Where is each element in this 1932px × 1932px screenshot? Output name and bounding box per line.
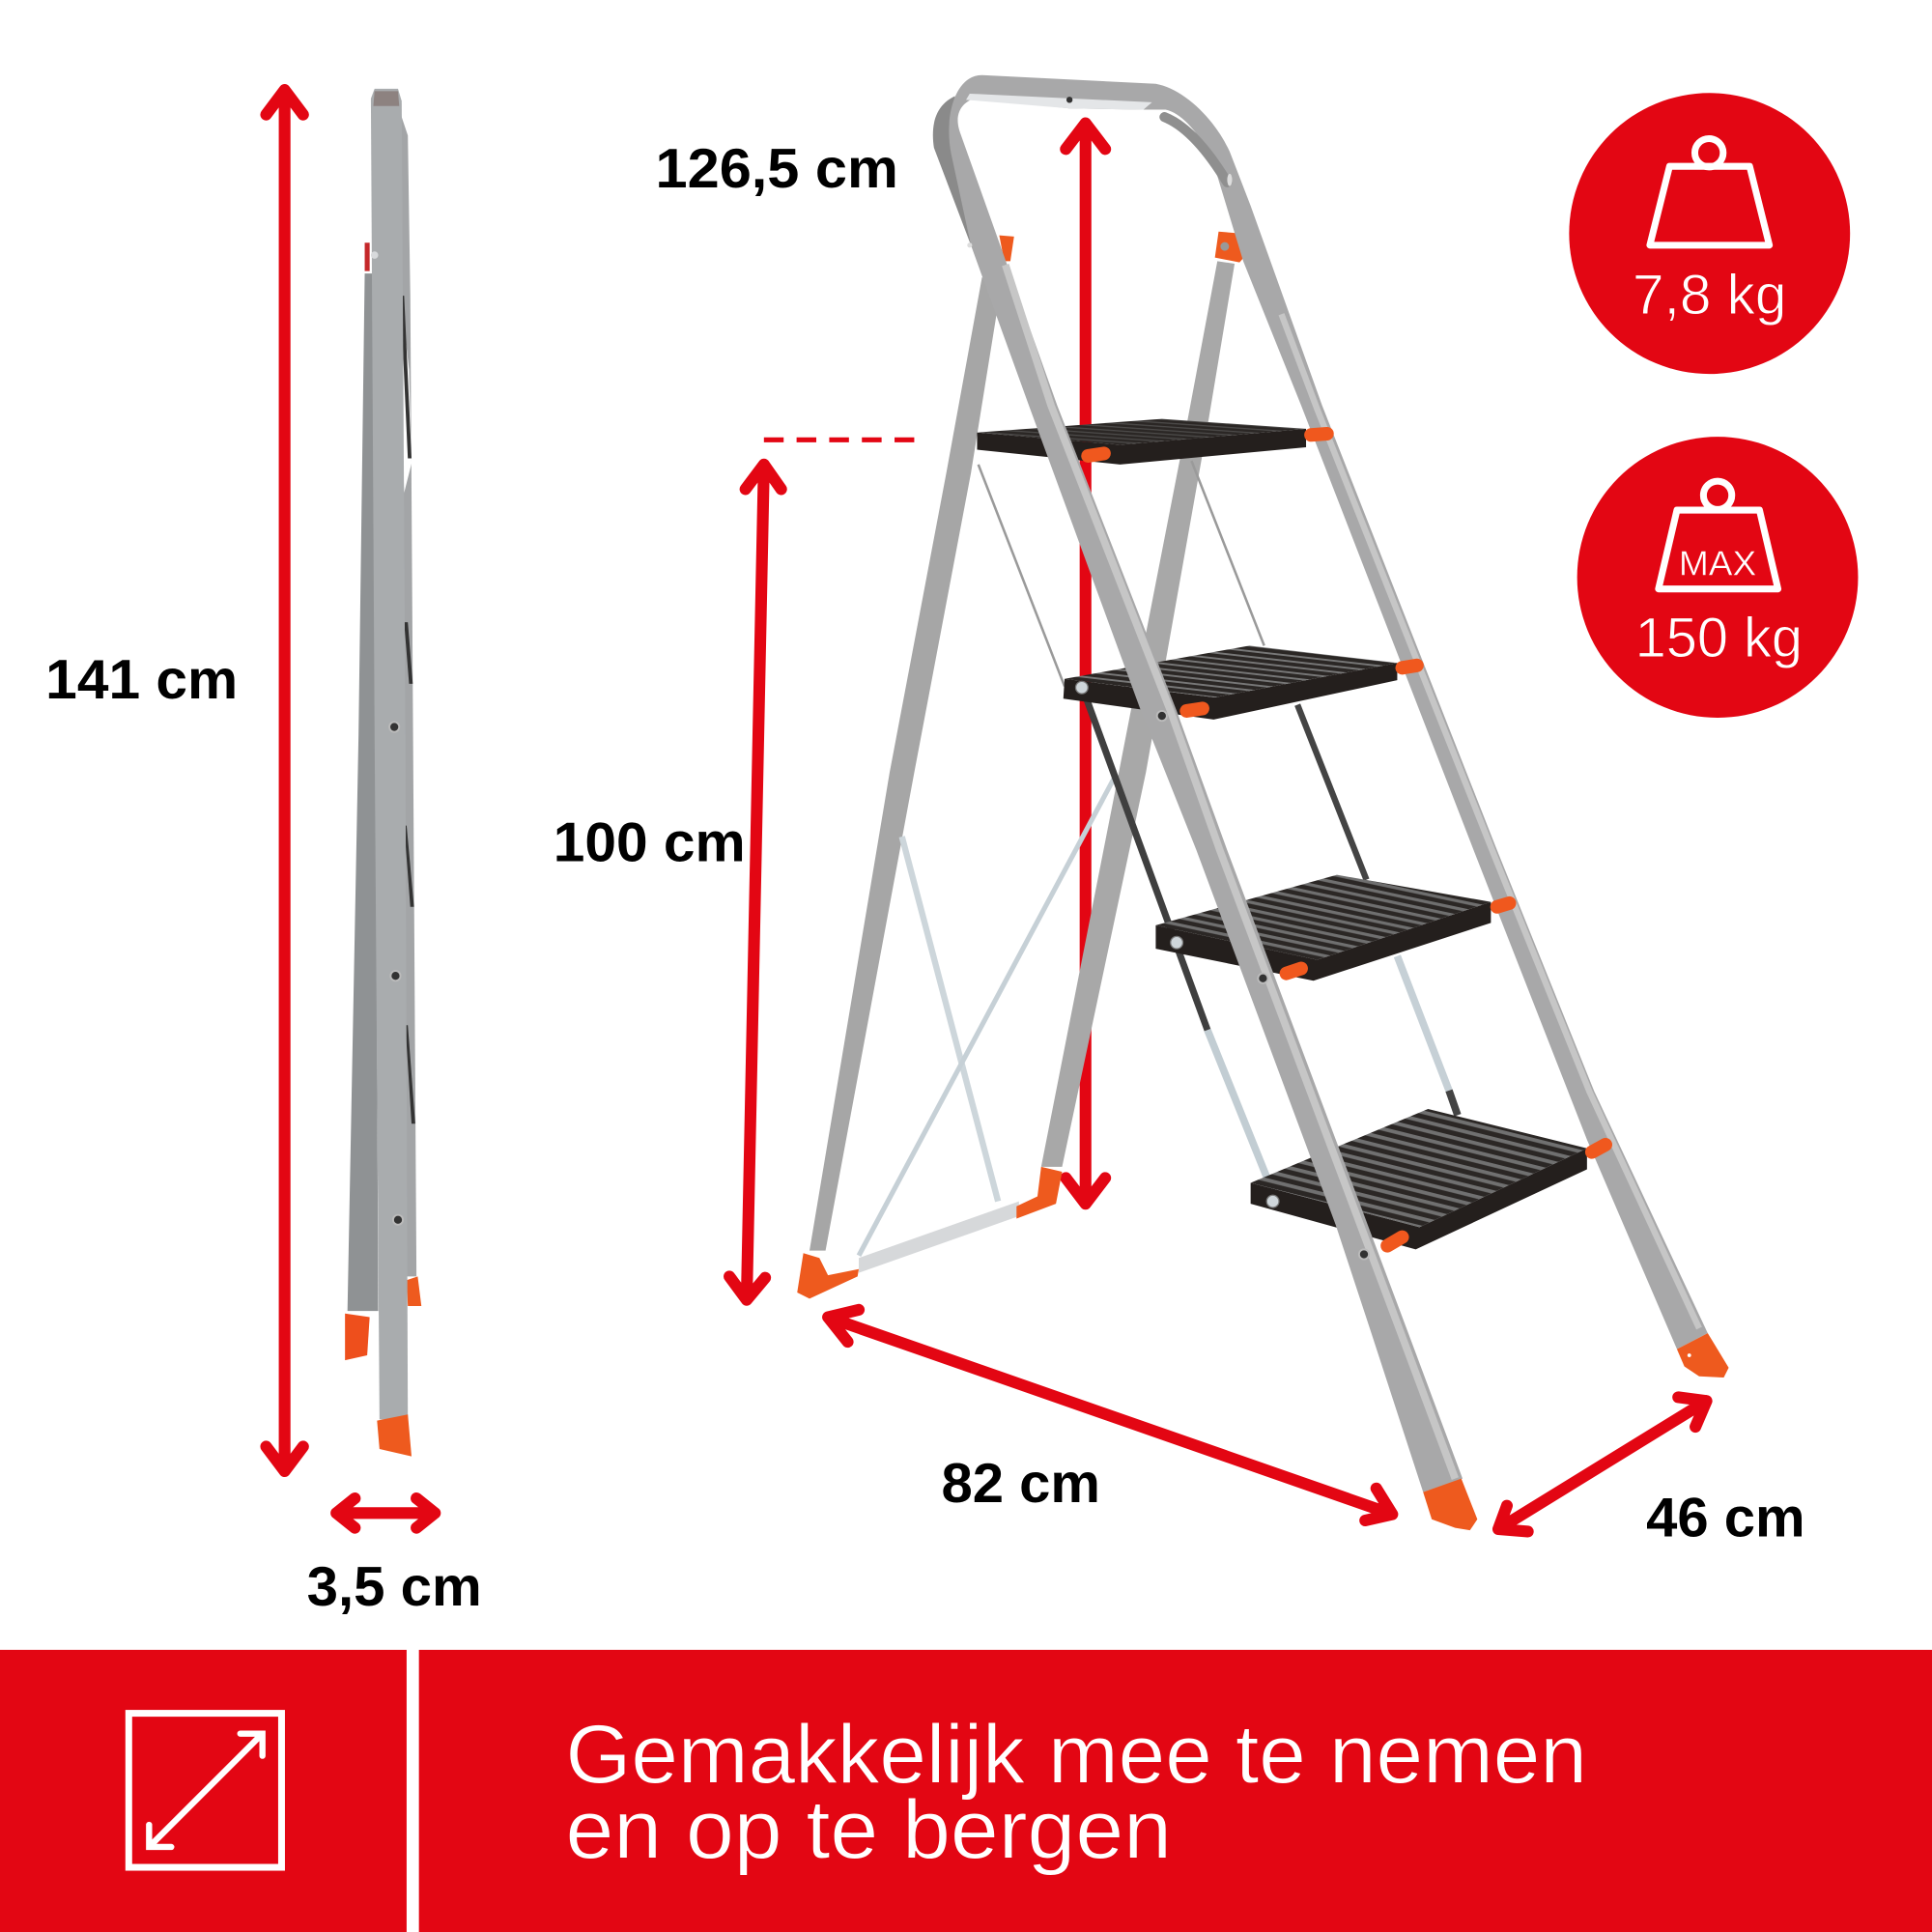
label 141 cm: 141 cm xyxy=(45,649,238,711)
ladder rear frame xyxy=(797,232,1249,1298)
step 1 xyxy=(977,419,1306,465)
label 3,5 cm: 3,5 cm xyxy=(307,1556,482,1618)
width arrow 3,5 cm xyxy=(336,1498,435,1528)
badge: weight 7,8 kg xyxy=(1569,93,1850,374)
bottom banner: en op te bergen xyxy=(565,1782,1172,1876)
step 2 xyxy=(1064,645,1397,720)
badge: max load 150 kg: 150 kg xyxy=(1635,607,1803,669)
arrow 126,5 cm xyxy=(1065,124,1105,1204)
icon: max weight xyxy=(1659,481,1778,589)
step 3 xyxy=(1155,875,1491,980)
badge: max load 150 kg: MAX xyxy=(1679,545,1756,583)
dashed step height line xyxy=(764,438,914,441)
icon: weight xyxy=(1650,138,1770,245)
icon: resize arrows in square xyxy=(128,1714,281,1867)
label 46 cm: 46 cm xyxy=(1646,1488,1805,1549)
ladder front frame xyxy=(933,75,1729,1530)
side view ladder (folded) xyxy=(345,89,421,1457)
banner text: Gemakkelijk mee te nemen xyxy=(565,1708,1587,1802)
badge: max load 150 kg xyxy=(1577,437,1858,718)
label 126,5 cm: 126,5 cm xyxy=(656,138,898,200)
arrow 46 cm xyxy=(1498,1397,1707,1531)
bottom banner xyxy=(0,1650,1932,1932)
spreader braces xyxy=(979,461,1458,1202)
orange step connectors xyxy=(1088,434,1605,1246)
height arrow 141 cm xyxy=(267,90,303,1471)
badge: weight 7,8 kg: 7,8 kg xyxy=(1633,264,1786,327)
step 4 xyxy=(1251,1109,1587,1249)
label 100 cm: 100 cm xyxy=(554,812,746,874)
arrow 82 cm xyxy=(828,1310,1392,1520)
arrow 100 cm xyxy=(729,465,781,1300)
label 82 cm: 82 cm xyxy=(941,1453,1100,1515)
